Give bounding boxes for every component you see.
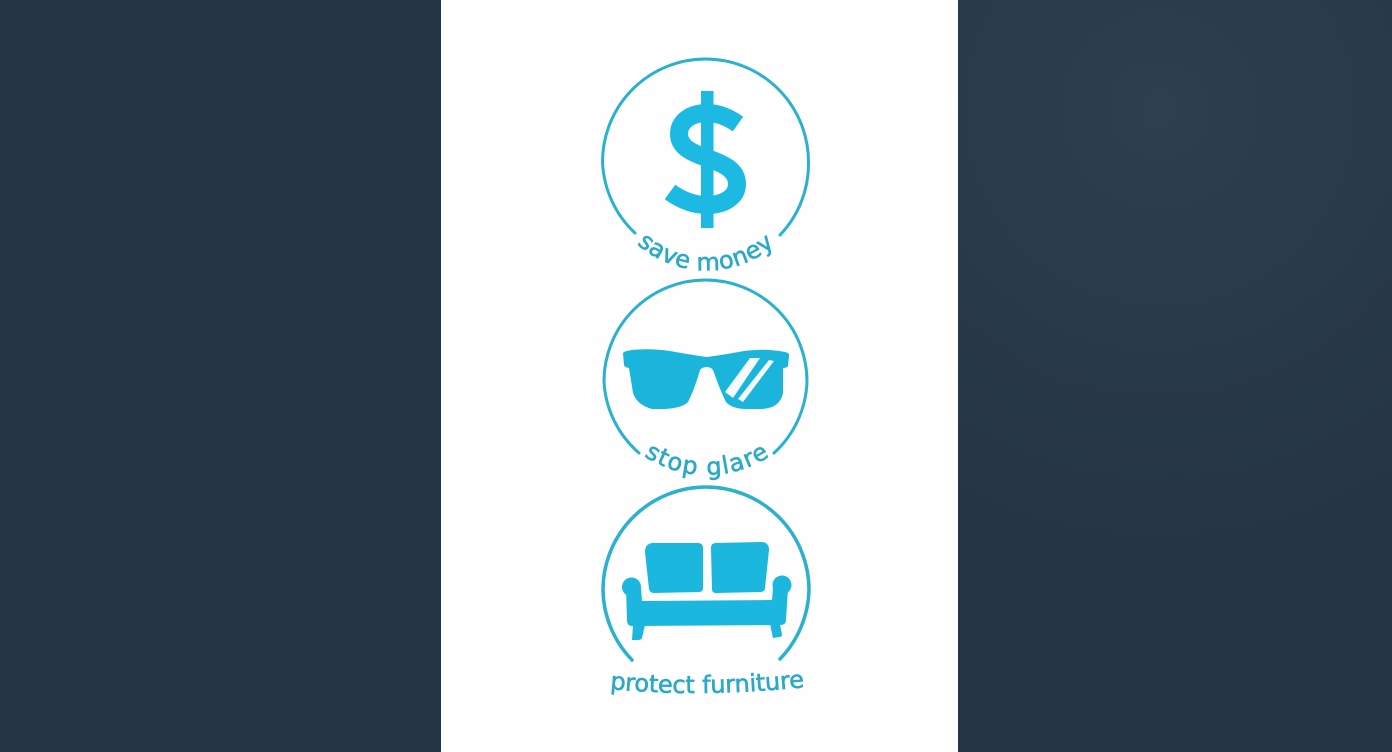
left dark background panel: [0, 0, 441, 752]
badge: save money: [601, 58, 810, 271]
circle outline: stop glare: [604, 280, 807, 453]
arc outline: protect furniture: [603, 487, 809, 660]
badge: stop glare: [602, 278, 808, 480]
right dark background panel: [957, 0, 1392, 752]
central white panel: [441, 0, 958, 752]
icon: dollar sign: [670, 91, 738, 228]
icon: sunglasses: [623, 349, 789, 409]
label: protect furniture: protect furniture: [611, 672, 804, 695]
badge: protect furniture: [601, 485, 811, 695]
circle outline: save money: [602, 59, 809, 235]
icon: sofa: [622, 542, 792, 640]
label: save money: save money: [638, 234, 772, 271]
label: stop glare: stop glare: [644, 446, 768, 480]
